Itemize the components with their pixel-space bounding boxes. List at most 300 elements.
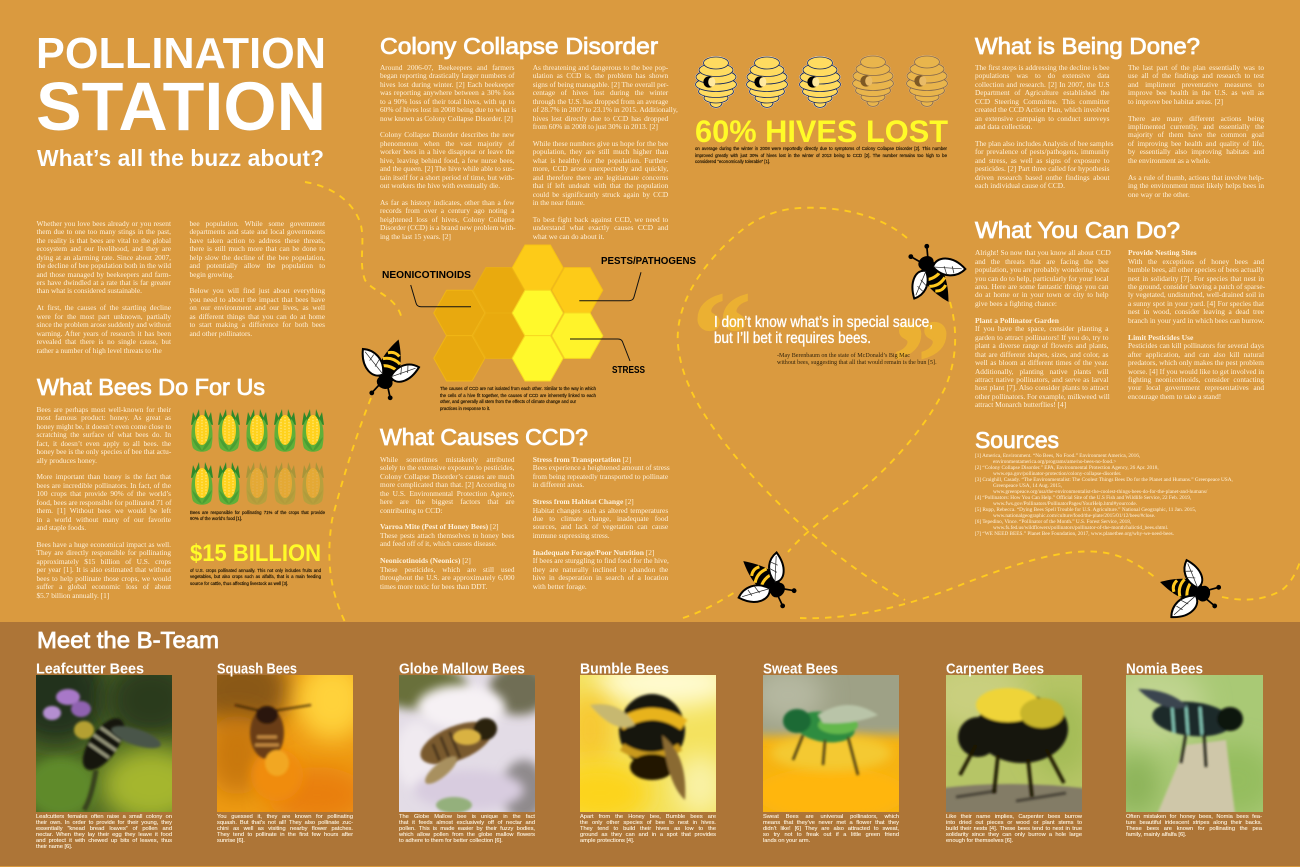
text block: what bees do for us: suffer a global economic loss of about xyxy=(36,582,171,591)
text block: what causes ccd column 1: These pesticides, which are still used xyxy=(380,565,514,574)
caption: squash bees: squash. But that’s not all! They also pollinate zuc- xyxy=(217,820,353,826)
caption: leafcutter bees xyxy=(36,814,172,850)
text block: intro column 2: begin growing. xyxy=(190,270,234,279)
text block: ccd column 2: and therefore there are legitiamate concerns xyxy=(533,173,668,182)
text block: being done column 2: and impliment preventative measures to xyxy=(1128,80,1264,89)
label: neonicotinoids xyxy=(382,270,471,307)
caption: globe mallow bees xyxy=(398,814,535,844)
text block: what you can do column 2: branch in your yard in which bees can burrow. xyxy=(1128,316,1264,325)
photo: squash bee xyxy=(217,675,353,812)
text block: being done column 2: The last part of the plan essentially was to xyxy=(1128,63,1264,72)
quote attribution xyxy=(777,352,937,366)
caption: squash bees: They tend to pollinate in the first few hours after xyxy=(217,832,353,838)
text block: what causes ccd column 1: here are the biggest factors that are xyxy=(380,497,514,506)
text block: what causes ccd column 2: with better forage. xyxy=(533,582,587,591)
caption: carpenter bees: Like their name implies, Carpenter bees burrow xyxy=(946,814,1082,820)
text block: being done column 2 xyxy=(1128,63,1264,199)
text block: intro column 1: them due to one too many stings in the past, xyxy=(36,227,171,236)
text block: being done column 1: Department of Agriculture established the xyxy=(975,88,1110,97)
heading: meet the b-team: Meet the B-Team xyxy=(37,627,219,653)
text block: being done column 1: The first steps is addressing the decline is bee xyxy=(975,63,1110,72)
sources list: www.fs.fed.us/wildflowers/pollinators/pollinator-of-the-month/halictid_bees.shtml. xyxy=(993,525,1168,531)
text block: what causes ccd column 2: hive in desperation in search of a location xyxy=(533,573,668,582)
text block: intro column 1: than what is considered sustainable. xyxy=(36,286,142,295)
caption: honeycomb: other, and generally all stem from the effects of climate change and our xyxy=(440,399,576,404)
text block: what causes ccd column 2: immune supressing stress. xyxy=(533,531,610,540)
text block: what you can do column 2: nest in solidarity [7]. For species that nest in xyxy=(1128,274,1264,283)
text block: ccd column 1: began reporting drastically larger numbers of xyxy=(380,71,514,80)
bee names: Leafcutter Bees xyxy=(36,662,144,678)
text block: what you can do column 2: bumble bees, all other species of bees actually xyxy=(1128,265,1264,274)
text block: what you can do column 1: garden to attract pollinators! If you do, try to xyxy=(975,333,1108,342)
text block: what causes ccd column 1: contributing to CCD: xyxy=(380,506,442,515)
text block: intro column 1: Whether you love bees already or you resent xyxy=(36,219,171,228)
text block: what you can do column 1: Additionally, planting native plants will xyxy=(975,367,1108,376)
text block: what you can do column 1: well as bloom at different times of the year. xyxy=(975,358,1108,367)
text block: what bees do for us: in a world without many of our favorite xyxy=(36,515,171,524)
text block: what you can do column 2: predators, which only makes the pest problem xyxy=(1128,358,1264,367)
caption: honeycomb: practices in response to it. xyxy=(440,406,490,410)
caption: corn statistic: Bees are responsible for pollinating 71% of the crops that provide xyxy=(190,510,325,514)
label: pests and pathogens: PESTS/PATHOGENS xyxy=(601,256,696,267)
text block: intro column 1: ers have dwindled at a rate that is far greater xyxy=(36,278,171,287)
text block: intro column 2: and other pollinators. xyxy=(190,329,252,338)
text block: ccd column 2: hives lost directly due to CCD has dropped xyxy=(533,114,668,123)
text block: intro column 1: the reality is that bees are vital to the global xyxy=(36,236,171,245)
photo: bumble bee xyxy=(580,675,716,812)
text block: ccd column 2: ulation as CCD is, the problem has shown xyxy=(533,71,668,80)
hive pictogram: 3 of 5 xyxy=(696,56,948,108)
caption: 60% hives lost: on average during the winter in 2008 were reportedly directly due to symptoms of Colony Collapse Disorder [2]. This number xyxy=(695,146,947,151)
text block: being done column 2: to improve bee habitat areas. [2] xyxy=(1128,97,1223,106)
caption: bumble bees: the only other species of bee to nest in hives. xyxy=(580,820,716,826)
photo: globe mallow bee xyxy=(399,675,535,812)
caption: 60% hives lost: improved greatly with just 30% of hives lost in the winter of 2013 being to CCD [2]. The number remains too high to be xyxy=(695,152,947,158)
bee names: Sweat Bees xyxy=(763,662,838,678)
text block: being done column 1: pesticides. [2] Part three called for hypothesis xyxy=(975,164,1110,173)
heading: what you can do: What You Can Do? xyxy=(975,217,1180,243)
text block: being done column 1: an extensive campaign to conduct sureveys xyxy=(975,114,1110,123)
text block: intro column 2: and potentially allow the population to xyxy=(190,261,325,270)
panel: meet the b-team xyxy=(0,622,1300,866)
text block: intro column 2: Below you will find just about everything xyxy=(190,286,325,295)
text block: intro column 2 xyxy=(190,219,325,338)
text block: what causes ccd column 1 xyxy=(380,455,514,591)
caption: leafcutter bees: essentially “knead bread loaves” of pollen and xyxy=(36,826,172,832)
text block: what bees do for us: honey might be, it doesn’t even come close to xyxy=(36,422,171,431)
bee names: Carpenter Bees xyxy=(946,662,1044,678)
text block: what you can do column 2: a sunny spot in your yard. [4] For species that xyxy=(1128,299,1264,308)
text block: ccd column 1: phenomenon when the vast majority of xyxy=(380,139,514,148)
icon: bee bottom centre xyxy=(723,540,808,624)
text block: ccd column 2: through the U.S. has dropped from an average xyxy=(533,97,668,106)
text block: ccd column 2: what is healthy for the population. Further- xyxy=(533,156,668,165)
caption: nomia bees: ture beautiful iridescent stripes along their backs. xyxy=(1126,820,1262,826)
caption: leafcutter bees: their own. In order to provide for their young, they xyxy=(36,820,172,826)
text block: what you can do column 1: and the threats that are facing the bee xyxy=(975,257,1108,266)
caption: leafcutter bees: their name [6]. xyxy=(36,844,72,850)
text block: being done column 1: each individual cause of CCD. xyxy=(975,181,1065,190)
text block: being done column 2: use all of the findings and research to test xyxy=(1128,71,1264,80)
text block: what causes ccd column 2: they are naturally inclined to abandon the xyxy=(533,565,668,574)
label: pests and pathogens xyxy=(579,256,696,301)
text block: being done column 1: driven research based onthe findings about xyxy=(975,173,1110,182)
text block: what you can do column 2: Limit Pesticides Use xyxy=(1128,333,1193,342)
text block: intro column 2: help slow the decline of the bee population, xyxy=(190,253,325,262)
text block: what causes ccd column 1: and feed off of it, which causes disease. xyxy=(380,539,497,548)
text block: what causes ccd column 2: sources, and lack of vegetation can cause xyxy=(533,522,668,531)
honeycomb diagram of causes xyxy=(382,245,696,381)
text block: what you can do column 2: ly vegetated, undisturbed, well-drained soil in xyxy=(1128,290,1264,299)
caption: honeycomb: The causes of CCD are not isolated from each other. Similar to the way in which xyxy=(440,386,596,391)
text block: ccd column 2: While these numbers give us hope for the bee xyxy=(533,139,668,148)
caption: sweat bees: so try not to freak out if a little green friend xyxy=(763,832,899,838)
text block: what bees do for us: and staple foods. xyxy=(36,523,86,532)
caption: squash bees: You guessed it, they are known for pollinating xyxy=(217,814,353,820)
sources list: environmentamerica.org/programs/ame/no-bees-no-food.> xyxy=(993,459,1116,465)
text block: what you can do column 1: other pollinators. For example, milkweed will xyxy=(975,392,1110,401)
caption: globe mallow bees: that it feeds almost exclusively off of nectar and xyxy=(399,820,535,826)
text block: being done column 2: As a rule of thumb, actions that involve help- xyxy=(1128,173,1264,182)
text block: what bees do for us: They are directly responsible for pollinating xyxy=(36,548,171,557)
text block: what causes ccd column 1: Neonicotinoids (Neonics) [2] xyxy=(380,556,471,565)
bee names: Bumble Bees xyxy=(580,662,669,678)
text block: being done column 1: created the CCD Action Plan, which involved xyxy=(975,105,1110,114)
title xyxy=(36,29,326,171)
text block: what causes ccd column 2: Stress from Transportation [2] xyxy=(533,455,631,464)
text block: being done column 2: the environment as a whole. xyxy=(1128,156,1211,165)
text block: being done column 1: and stress, as well as signs of exposure to xyxy=(975,156,1110,165)
text block: ccd column 2: what we can do about it. xyxy=(533,232,604,241)
text block: intro column 2: to start making a difference for both bees xyxy=(190,320,325,329)
icon: bee left xyxy=(350,330,425,407)
photo: nomia bee xyxy=(1126,675,1263,812)
text block: ccd column 2: could be significantly struck again by CCD xyxy=(533,190,668,199)
text block: intro column 2: departments and state and local governments xyxy=(190,227,325,236)
text block: ccd column 2 xyxy=(532,63,678,241)
text block: what bees do for us: bees are incredible pollinators. In fact, of the xyxy=(36,481,171,490)
text block: ccd column 1: hive, leaving behind food, a few nurse bees, xyxy=(380,156,514,165)
text block: intro column 2: as different things that you can do at home xyxy=(190,312,325,321)
caption: corn statistic: 90% of the world’s food [1]. xyxy=(190,516,242,521)
caption: honeycomb: the cells of a hive fit together, the causes of CCD are inherently linked to each xyxy=(440,392,596,398)
bee names: Globe Mallow Bees xyxy=(399,662,525,678)
stat: $15 billion: $15 BILLION xyxy=(190,540,321,567)
text block: being done column 2: ing the environment most likely helps bees in xyxy=(1128,181,1264,190)
text block: ccd column 1: worker bees in a hive disappear or leave the xyxy=(380,147,514,156)
text block: ccd column 2: that if left undealt with that the population xyxy=(533,181,668,190)
quote attribution: -May Berenbaum on the state of McDonald’s Big Mac xyxy=(777,352,910,358)
caption: carpenter bees: build their nests [4]. These bees tend to nest in true xyxy=(946,826,1082,832)
text block: what bees do for us: More important than honey is the fact that xyxy=(36,472,171,481)
text block: intro column 1: revealed that there is no single cause, but xyxy=(36,337,171,346)
bee names: Squash Bees xyxy=(217,662,297,678)
photo: leafcutter bee xyxy=(36,675,172,812)
text block: ccd column 2: To best fight back against CCD, we need to xyxy=(533,215,668,224)
bee names xyxy=(36,662,1203,678)
caption: sweat bees: lands on your arm. xyxy=(763,838,810,844)
caption: bumble bees: ground as they can and in a spot that provides xyxy=(580,832,716,838)
text block: what bees do for us: per year [1]. It is also estimated that without xyxy=(36,565,171,574)
text block: what you can do column 2: Pesticides can kill pollinators for several days xyxy=(1128,341,1264,350)
text block: what causes ccd column 2: Bees experience a heightened amount of stress xyxy=(533,463,670,472)
text block: intro column 2: you need to about the impact that bees have xyxy=(190,295,325,304)
label: stress: STRESS xyxy=(612,365,645,376)
icon: bee top right xyxy=(894,233,975,316)
text block: what bees do for us: bees to help pollinate those crops, we would xyxy=(36,574,171,583)
heading: what bees do for us: What Bees Do For Us xyxy=(37,374,265,400)
quote: but I’ll bet it requires bees. xyxy=(714,330,871,347)
text block: intro column 1: since the problem arose suddenly and without xyxy=(36,320,171,329)
text block: ccd column 1: Around 2006-07, Beekeepers and farmers xyxy=(380,63,514,72)
text block: what you can do column 1: do at home or in your town or city to help xyxy=(975,290,1108,299)
quote attribution: without bees, suggesting that all that would remain is the bun [5]. xyxy=(777,360,937,366)
quote xyxy=(693,270,950,425)
caption: squash bees xyxy=(217,814,353,844)
heading: what causes ccd: What Causes CCD? xyxy=(380,424,588,450)
text block: what causes ccd column 1: While sometimes mistakenly attributed xyxy=(380,455,514,464)
text block: what causes ccd column 1: throughout the U.S. are approximately 6,000 xyxy=(380,573,514,582)
caption: honeycomb xyxy=(440,386,596,412)
text block: what you can do column 2: worse. [4] If you would like to get involved in xyxy=(1128,367,1264,376)
text block: being done column 2: majority of them have the common goal xyxy=(1128,130,1264,139)
text block: intro column 1: the decline of bee population both in the wild xyxy=(36,261,171,270)
caption: carpenter bees: enough for themselves [6]. xyxy=(946,838,1013,844)
text block: what bees do for us: $5.7 billion annually. [1] xyxy=(36,591,109,600)
text block: what you can do column 1 xyxy=(975,248,1111,409)
text block: what you can do column 1: area. Here are some fantastic things you can xyxy=(975,282,1108,291)
text block: what you can do column 2: nest in wood, consider leaving a dead tree xyxy=(1128,307,1264,316)
text block: what bees do for us: 100 crops that provide 90% of the world’s xyxy=(36,489,171,498)
text block: what bees do for us: most famous product: honey. As great as xyxy=(36,413,171,422)
text block: intro column 2: have taken action to address these threats, xyxy=(190,236,325,245)
text block: intro column 2: bee population. While some government xyxy=(190,219,325,228)
bee names: Nomia Bees xyxy=(1126,662,1203,678)
text block: what you can do column 1: plant a diverse range of flowers and plants, xyxy=(975,341,1108,350)
text block: intro column 1: warning. After years of research it has been xyxy=(36,329,171,338)
quote: I don’t know what’s in special sauce, xyxy=(714,314,933,331)
text block: being done column 1: for prevalence of pests/pathogens, immunity xyxy=(975,147,1110,156)
sources list: [1] America, Environment. “No Bees, No Food.” Environment America, 2016, [2] “Colony Collapse Disorder.” EPA, Environmental Protection Agency, 26 Apr. 2018, [3] Craighill, Casady. “The Environmentalist: The Coolest Things Bees Do for the Planet and Humans.” Greenpeace USA, [4] “Pollinators: How You Can Help.” Official Site of the U.S Fish and Wildlife Service, 22 Feb. 2019, [5] Rupp, Rebecca. “Dying Bees Spell Trouble for U.S. Agriculture.” National Geographic, 11 Jan. 2015, [6] Tepedino, Vince. “Pollinator of the Month.” U.S. Forest Service, 2018, [7] “WE NEED BEES.” Planet Bee Foundation, 2017, www.planetbee.org/why-we-need-bees. xyxy=(975,452,1233,537)
text block: ccd column 2: of 28.7% in 2007 to 23.1% in 2015. Additionally, xyxy=(533,105,678,114)
caption: sweat bees: Sweat Bees are universal pollinators, which xyxy=(763,814,899,820)
text block: ccd column 1: Colony Collapse Disorder describes the new xyxy=(380,130,514,139)
sources list: www.greenpeace.org/usa/the-environmentalist-the-coolest-things-bees-do-for-the-planet-and-humans/ xyxy=(993,489,1207,495)
caption: globe mallow bees: which allow pollen from the globe mallow flowers xyxy=(399,832,535,838)
text block: being done column 1 xyxy=(975,63,1114,190)
text block: what you can do column 1: attract native pollinators, and serve as larval xyxy=(975,375,1108,384)
flight path: dashed trail xyxy=(305,182,1300,622)
text block: what causes ccd column 2: Inadequate Forage/Poor Nutrition [2] xyxy=(533,548,654,557)
text block: being done column 2: by essentially also improving habitats and xyxy=(1128,147,1264,156)
text block: what you can do column 2: after application, and can also kill natural xyxy=(1128,350,1264,359)
caption: nomia bees xyxy=(1126,814,1262,838)
text block: ccd column 1: now known as Colony Collapse Disorder. [2] xyxy=(380,114,513,123)
text block: ccd column 1: ing the last 15 years. [2] xyxy=(380,232,451,241)
caption: 60% hives lost xyxy=(695,146,947,164)
sources list: www.fws.gov/Pollinators/PollinatorPages/YourHelp.html#yourcode. xyxy=(993,501,1137,507)
text block: what you can do column 2: With the exceptions of honey bees and xyxy=(1128,257,1264,266)
caption: leafcutter bees: and protect it with chewed up bits of leaves, thus xyxy=(36,838,172,844)
text block: what you can do column 2: your local government representatives and xyxy=(1128,383,1264,392)
text block: what you can do column 1: you can do to help, particularly for your local xyxy=(975,274,1109,283)
text block: what you can do column 1: Alright! So now that you know all about CCD xyxy=(975,248,1111,257)
text block: what causes ccd column 1: These pests attach themselves to honey bees xyxy=(380,531,514,540)
text block: what bees do for us: them. [1] Without bees we would be left xyxy=(36,506,171,515)
caption: carpenter bees: solidarity since they can only burrow a hole large xyxy=(946,832,1082,838)
icon: bee bottom right xyxy=(1152,555,1227,628)
text block: ccd column 1: Disorder (CCD) is a brand new problem with- xyxy=(380,223,516,232)
caption: nomia bees: family, mainly alfalfa [6]. xyxy=(1126,832,1186,838)
text block: ccd column 1: As far as history indicates, other than a few xyxy=(380,198,514,207)
caption: $15 billion: vegetables, but also crops such as alfalfa, that is a main feeding xyxy=(190,574,321,579)
text block: being done column 1: collection and research. [2] In 2007, the U.S xyxy=(975,80,1110,89)
text block: what bees do for us: fact, it doesn’t even apply to all bees. the xyxy=(36,439,171,448)
pictogram: corn 71 of 100 xyxy=(191,409,324,505)
text block: being done column 1: The plan also includes Analysis of bee samples xyxy=(975,139,1113,148)
text block: intro column 1: dying at an alarming rate. Since about 2007, xyxy=(36,253,171,262)
text block: intro column 2: there is still much more that can be done to xyxy=(190,244,325,253)
text block: what bees do for us: Bees have a huge economical impact as well. xyxy=(36,540,171,549)
text block: ccd column 1: out workers the hive with eventually die. xyxy=(380,181,500,190)
text block: what you can do column 1: that are different shapes, sizes, and color, as xyxy=(975,350,1108,359)
caption: globe mallow bees: The Globe Mallow bee is unique in the fact xyxy=(399,814,535,820)
text block: ccd column 1: hives lost during winter. [2] Each beekeeper xyxy=(380,80,514,89)
caption: leafcutter bees: nectar. When they lay their egg they leave it food xyxy=(36,832,172,838)
text block: being done column 1: populations was to do extensive data xyxy=(975,71,1110,80)
text block: ccd column 2: from 60% in 2008 to just 30% in 2013. [2] xyxy=(533,122,658,131)
background panel xyxy=(0,0,1300,622)
text block: what you can do column 2: Provide Nesting Sites xyxy=(1128,248,1197,257)
text block: what causes ccd column 2: due to climate change, inadequate food xyxy=(533,514,668,523)
text block: ccd column 2: understand what exactly causes CCD and xyxy=(533,223,668,232)
title: What’s all the buzz about? xyxy=(37,145,324,171)
quote: “ xyxy=(693,270,750,397)
text block: what bees do for us xyxy=(36,405,172,600)
text block: what causes ccd column 1: times more toxic for bees than DDT. xyxy=(380,582,487,591)
text block: being done column 2: one way or the other. xyxy=(1128,190,1190,199)
text block: what you can do column 2: fighting neonicotinoids, consider contacting xyxy=(1128,375,1264,384)
text block: intro column 1: rather a number of high level threats to the xyxy=(36,346,162,355)
caption: nomia bees: These bees are known for pollinating the pea xyxy=(1126,826,1262,832)
text block: intro column 1 xyxy=(36,219,172,355)
caption: carpenter bees xyxy=(946,814,1082,844)
text block: what causes ccd column 1: the U.S. Environmental Protection Agency, xyxy=(380,489,514,498)
heading: what is being done: What is Being Done? xyxy=(975,33,1200,59)
caption: squash bees: chini as well as visiting nearby flower patches. xyxy=(217,826,353,832)
stat: 60% hives lost: 60% HIVES LOST xyxy=(695,113,948,149)
text block: ccd column 2: signs of being managable. [2] The overall per- xyxy=(533,80,669,89)
text block: what bees do for us: Bees are perhaps most well-known for their xyxy=(36,405,171,414)
text block: what you can do column 1: host plant [7]. Also consider plants to attract xyxy=(975,383,1108,392)
text block: what bees do for us: food, bees are responsible for pollinated 71 of xyxy=(36,498,172,507)
text block: intro column 1: ecosystem and our livelihood, and they are xyxy=(36,244,171,253)
text block: what bees do for us: ally produces honey. xyxy=(36,456,97,465)
heading: colony collapse disorder: Colony Collapse Disorder xyxy=(380,33,658,59)
text block: what causes ccd column 2 xyxy=(532,455,670,591)
text block: ccd column 1: 60% of hives lost in 2008 being due to what is xyxy=(380,105,516,114)
text block: being done column 2: implimented currently, and essentially the xyxy=(1128,122,1264,131)
text block: intro column 1: and those managed by beekeepers and farm- xyxy=(36,270,171,279)
caption: bumble bees: They tend to build their hives as low to the xyxy=(580,826,716,832)
text block: intro column 1: At first, the causes of the startling decline xyxy=(36,303,171,312)
text block: what you can do column 1: population, you are probably wondering what xyxy=(975,265,1109,274)
text block: ccd column 2: more, CCD arose unexpectedly and quickly, xyxy=(533,164,668,173)
text block: what you can do column 1: give bees a fighting chance: xyxy=(975,299,1057,308)
caption: globe mallow bees: pollen. This is made easier by their fuzzy bodies, xyxy=(399,826,535,832)
text block: intro column 1: were for the most part unknown, partially xyxy=(36,312,171,321)
text block: what causes ccd column 1: more complicated than that. [2] According to xyxy=(380,480,514,489)
caption: nomia bees: Often mistaken for honey bees, Nomia bees fea- xyxy=(1126,814,1262,820)
text block: what you can do column 2 xyxy=(1128,248,1265,401)
text block: what bees do for us: honey bee is the only species of bee that actu- xyxy=(36,447,171,456)
sources list: www.epa.gov/pollinator-protection/colony-collapse-disorder. xyxy=(993,471,1121,477)
caption: squash bees: sunrise [6]. xyxy=(217,838,245,844)
text block: being done column 1: CCD Steering Committee. This committer xyxy=(975,97,1110,106)
title: POLLINATION xyxy=(36,29,326,78)
text block: ccd column 2: population, they are still much higher than xyxy=(533,147,668,156)
caption: bumble bees xyxy=(580,814,716,844)
text block: what causes ccd column 2: Stress from Habitat Change [2] xyxy=(533,497,634,506)
text block: what causes ccd column 2: If bees are sturggling to find food for the hive, xyxy=(533,556,669,565)
photo: sweat bee xyxy=(763,675,899,812)
text block: what you can do column 1: attract Monarch butterflies! [4] xyxy=(975,400,1066,409)
sources list: www.nationalgeographic.com/culture/food/the-plate/2015/01/12/bees/#close. xyxy=(993,513,1155,519)
caption: globe mallow bees: to adhere to them for better collection [6]. xyxy=(399,838,503,844)
text block: being done column 2: improve bee health in the U.S. as well as xyxy=(1128,88,1264,97)
text block: what causes ccd column 1: Varroa Mite (Pest of Honey Bees) [2] xyxy=(380,522,499,531)
caption: $15 billion: of U.S. crops pollinated annually. This not only includes fruits and xyxy=(190,568,321,572)
caption: leafcutter bees: Leafcutters females often raise a small colony on xyxy=(36,814,172,820)
caption: corn statistic xyxy=(190,510,325,522)
caption: carpenter bees: into dried out pieces or wood or plant stems to xyxy=(946,820,1082,826)
heading: sources: Sources xyxy=(975,427,1059,453)
text block: what causes ccd column 2: Habitat changes such as altered temperatures xyxy=(533,506,668,514)
text block: ccd column 1: and the queen. [2] The hive while able to sus- xyxy=(380,164,514,173)
caption: bumble bees: ample protections [4]. xyxy=(580,838,634,844)
text block: being done column 2: There are many different actions being xyxy=(1128,114,1264,122)
label: neonicotinoids: NEONICOTINOIDS xyxy=(382,270,471,281)
text block: ccd column 2: centage of hives lost during the winter xyxy=(533,88,668,97)
text block: being done column 2: of improving bee health and quality of life, xyxy=(1128,139,1264,148)
text block: what you can do column 1: Plant a Pollinator Garden xyxy=(975,316,1059,325)
label: stress xyxy=(570,339,645,376)
caption: bumble bees: Apart from the Honey bee, Bumble bees are xyxy=(580,814,716,820)
text block: ccd column 2: As threatening and dangerous to the bee pop- xyxy=(533,63,668,72)
caption: $15 billion: source for cattle, thus affecting livestock as well [3]. xyxy=(190,580,288,586)
text block: what you can do column 1: If you have the space, consider planting a xyxy=(975,324,1108,333)
text block: ccd column 1: records from over a century ago noting a xyxy=(380,206,514,215)
caption: 60% hives lost: considered “economically tolerable” [1]. xyxy=(695,159,770,164)
text block: ccd column 1: to a 90% loss of their total hives, with up to xyxy=(380,97,514,106)
photo: carpenter bee xyxy=(946,675,1082,812)
text block: what bees do for us: scratching the surface of what bees do. In xyxy=(36,430,171,439)
text block: ccd column 1: heightened loss of hives, Colony Collapse xyxy=(380,215,514,224)
text block: ccd column 1: was reporting anywhere between a 30% loss xyxy=(380,88,514,97)
text block: being done column 1: and data collection. xyxy=(975,122,1032,131)
text block: what bees do for us: approximately $15 billion of U.S. crops xyxy=(36,557,171,566)
text block: what causes ccd column 1: Colony Collapse Disorder’s causes are much xyxy=(380,472,514,481)
quote: ” xyxy=(893,298,950,425)
text block: ccd column 1: tain itself for a short period of time, but with- xyxy=(380,173,514,182)
sources list: Greenpeace USA, 14 Aug. 2015, xyxy=(993,483,1062,489)
text block: ccd column 2: in the near future. xyxy=(533,198,585,207)
text block: what you can do column 2: encourage them to take a stand! xyxy=(1128,392,1221,401)
caption: sweat bees: means that they’ve never met a flower that they xyxy=(763,820,899,826)
text block: what you can do column 2: the ground, consider leaving a patch of sparse- xyxy=(1128,282,1265,291)
text block: what causes ccd column 2: from being repeatedly transported to pollinate xyxy=(533,472,668,481)
text block: intro column 2: on our environment and our lives, as well xyxy=(190,303,325,312)
